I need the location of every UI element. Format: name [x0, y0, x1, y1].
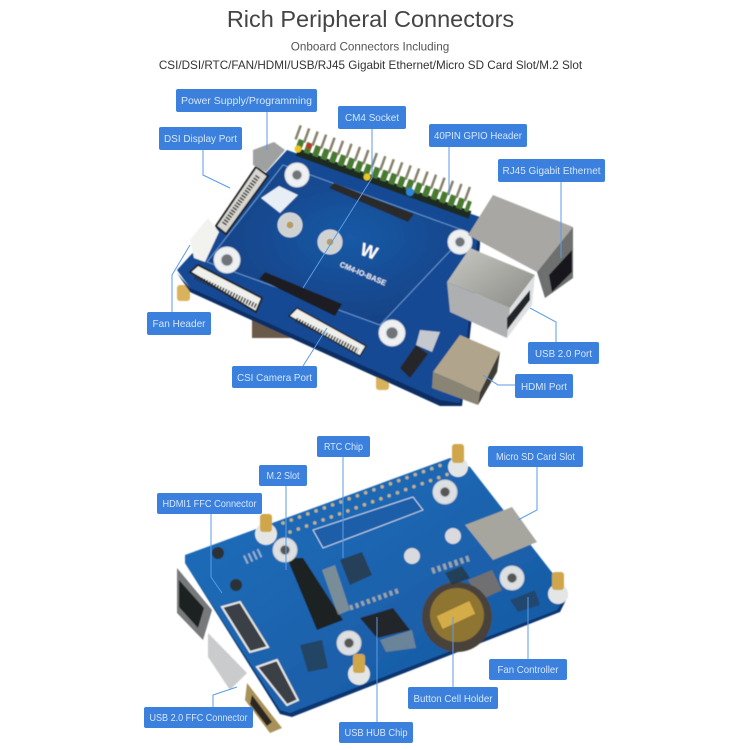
label: USB 2.0 Port: USB 2.0 Port — [535, 348, 592, 360]
label: Power Supply/Programming — [176, 89, 317, 112]
label: Micro SD Card Slot: Micro SD Card Slot — [496, 451, 575, 463]
label: Fan Header: Fan Header — [152, 318, 206, 330]
RJ45 jack — [468, 195, 573, 298]
M.2 slot — [287, 558, 343, 630]
CM4 sockets — [259, 183, 414, 316]
CM4 area — [207, 165, 468, 325]
mounting holes — [214, 163, 472, 346]
label: CSI Camera Port: CSI Camera Port — [237, 372, 312, 384]
label: HDMI1 FFC Connector — [157, 493, 262, 514]
board name: CM4-IO-BASE — [338, 260, 388, 288]
board: bottom view — [177, 444, 568, 733]
PCB edge — [185, 563, 568, 717]
USB hub chip — [360, 608, 410, 638]
switch and LEDs — [400, 330, 440, 378]
label: USB HUB Chip — [339, 722, 413, 743]
label: HDMI Port: HDMI Port — [521, 381, 567, 393]
label: RTC Chip: RTC Chip — [324, 441, 363, 453]
board: top view — [177, 132, 573, 406]
label: HDMI1 FFC Connector: HDMI1 FFC Connector — [162, 498, 257, 510]
title: Rich Peripheral Connectors — [227, 6, 514, 32]
label: RJ45 Gigabit Ethernet: RJ45 Gigabit Ethernet — [502, 165, 601, 177]
micro USB — [253, 142, 285, 172]
PCB surface — [177, 150, 480, 403]
label: CSI Camera Port — [232, 366, 317, 388]
CSI connectors — [190, 265, 366, 356]
GPIO header — [294, 132, 470, 215]
USB port — [208, 633, 247, 690]
label: Button Cell Holder: Button Cell Holder — [414, 693, 493, 705]
label: USB 2.0 FFC Connector — [144, 707, 253, 728]
label: CM4 Socket — [338, 106, 406, 129]
HDMI port — [245, 683, 282, 733]
label: 40PIN GPIO Header: 40PIN GPIO Header — [434, 130, 522, 142]
label: DSI Display Port: DSI Display Port — [164, 133, 237, 145]
silkscreen box — [313, 497, 423, 548]
USB ports — [447, 248, 535, 338]
component clusters — [212, 547, 540, 672]
label: RJ45 Gigabit Ethernet — [498, 159, 605, 182]
FFC connectors — [222, 602, 298, 705]
label: M.2 Slot — [259, 465, 307, 486]
button cell holder — [422, 582, 492, 652]
label: Fan Controller — [489, 659, 567, 680]
PCB surface — [185, 458, 568, 713]
logo: W — [358, 239, 380, 264]
connector list: CSI/DSI/RTC/FAN/HDMI/USB/RJ45 Gigabit Ethernet/Micro SD Card Slot/M.2 Slot — [159, 59, 583, 72]
label: Micro SD Card Slot — [488, 446, 583, 467]
HDMI port — [432, 335, 500, 405]
standoffs and underside pins — [177, 285, 389, 390]
label: USB 2.0 FFC Connector: USB 2.0 FFC Connector — [150, 712, 248, 724]
inductor — [468, 570, 502, 600]
white label patch — [261, 186, 298, 213]
label: USB 2.0 Port — [528, 342, 599, 364]
label: 40PIN GPIO Header — [429, 124, 527, 147]
label: Button Cell Holder — [408, 687, 498, 709]
label: M.2 Slot: M.2 Slot — [266, 470, 300, 482]
board edge — [177, 225, 480, 406]
label: DSI Display Port — [159, 127, 242, 150]
label: HDMI Port — [515, 374, 573, 398]
DSI connector — [216, 167, 268, 234]
leader lines — [172, 112, 561, 722]
label: RTC Chip — [317, 436, 370, 457]
label: CM4 Socket: CM4 Socket — [345, 112, 399, 124]
label: USB HUB Chip: USB HUB Chip — [344, 727, 408, 739]
mounting holes — [273, 480, 524, 655]
standoffs — [255, 444, 568, 685]
fan header — [190, 218, 219, 262]
subtitle: Onboard Connectors Including — [291, 40, 449, 54]
RJ45 jack — [177, 568, 212, 640]
header holes — [283, 463, 454, 532]
label: Fan Controller: Fan Controller — [498, 664, 559, 676]
micro SD slot — [465, 507, 537, 560]
label: Power Supply/Programming: Power Supply/Programming — [181, 95, 312, 107]
label: Fan Header — [147, 312, 211, 335]
